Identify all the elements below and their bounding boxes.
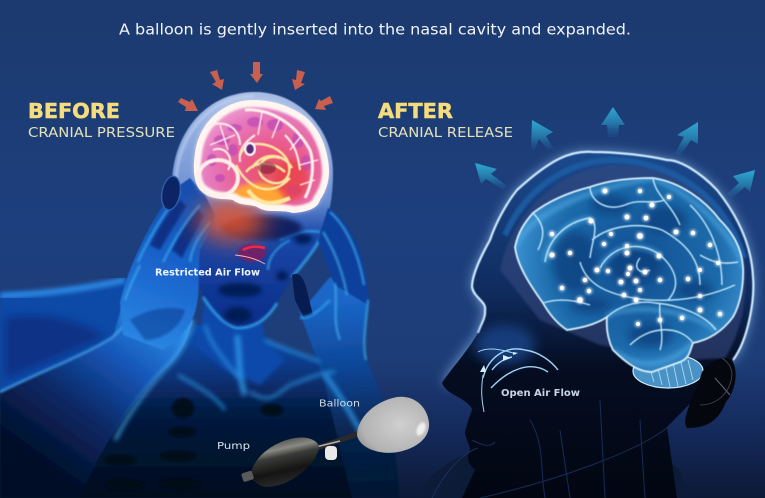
nasal arrows — [480, 352, 518, 372]
pump and balloon device — [241, 397, 429, 487]
balloon — [357, 397, 429, 453]
release arrows — [475, 107, 755, 198]
label: balloon: Balloon — [319, 398, 360, 410]
heading: after — [378, 99, 513, 141]
nose red — [235, 244, 266, 264]
valve — [325, 446, 337, 460]
nasal passage — [478, 349, 558, 412]
lobe shading — [515, 178, 743, 363]
after figure — [415, 152, 753, 498]
pump cap — [241, 470, 254, 482]
head silhouette — [442, 152, 753, 498]
hot glow — [198, 198, 266, 242]
chest — [50, 325, 375, 498]
inner cranial band — [500, 165, 746, 360]
brain folds — [533, 178, 738, 350]
ribs — [104, 398, 283, 490]
yellow loops — [236, 144, 292, 203]
brain after — [515, 178, 743, 372]
balloon highlight — [414, 421, 428, 437]
face jaw outline — [203, 231, 323, 328]
heading: before: CRANIAL PRESSURE — [28, 126, 175, 141]
neck — [195, 300, 285, 385]
connector tube — [314, 434, 358, 449]
pressure arrows — [178, 62, 333, 111]
label: restricted air flow: Restricted Air Flow — [155, 268, 260, 278]
thumb — [292, 274, 313, 318]
brow shadow — [222, 216, 302, 240]
head — [172, 92, 333, 328]
dark core — [245, 143, 255, 155]
label: pump: Pump — [217, 441, 250, 452]
nasal region — [475, 325, 535, 365]
right arm — [300, 277, 400, 498]
heading: before — [28, 99, 175, 141]
white rim — [194, 100, 329, 213]
eye and mouth shadows — [218, 234, 312, 323]
label: open air flow: Open Air Flow — [501, 388, 580, 399]
before figure — [0, 92, 400, 498]
magenta lobes — [207, 117, 311, 195]
back shoulder — [0, 277, 135, 393]
heading: after: CRANIAL RELEASE — [378, 126, 513, 141]
skull outline — [472, 152, 753, 360]
left hand — [120, 178, 215, 350]
glow — [442, 152, 753, 400]
jaw lines — [432, 400, 668, 498]
white folds — [198, 110, 318, 198]
shoulders — [415, 440, 690, 498]
orange base — [230, 183, 286, 211]
pump bulb — [250, 437, 319, 487]
heading: after: AFTER — [378, 99, 453, 123]
title: A balloon is gently inserted into the nasal cavity and expanded. — [119, 20, 631, 38]
ear — [685, 358, 736, 428]
brain before — [190, 95, 335, 217]
brain sparkles — [550, 189, 722, 326]
ear — [159, 175, 183, 211]
collarbones — [178, 325, 365, 440]
right hand fingers — [318, 208, 368, 305]
cerebellum — [633, 354, 703, 388]
body shapes — [0, 277, 400, 498]
forearm — [0, 303, 193, 498]
heading: before: BEFORE — [28, 99, 120, 123]
